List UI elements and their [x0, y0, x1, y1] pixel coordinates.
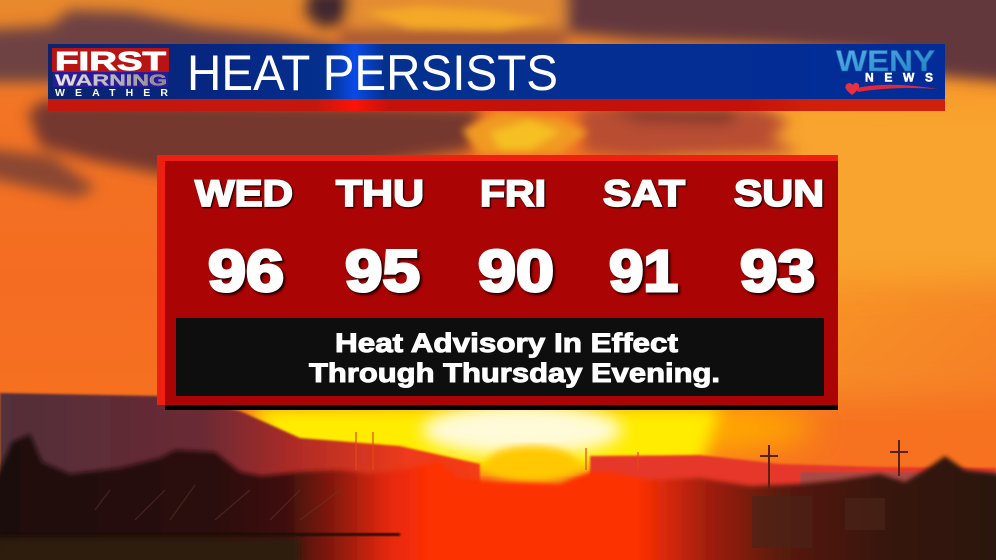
ground and tree line: [0, 432, 996, 560]
logo: First Warning Weather: WEATHER: [55, 87, 168, 99]
temperatures: [208, 239, 815, 304]
forecast panel: [157, 155, 838, 410]
advisory box: [176, 318, 824, 396]
sun glow: [235, 392, 815, 482]
clouds: [0, 0, 996, 198]
distant hills: [0, 393, 996, 510]
day labels: THU: [336, 173, 424, 214]
day labels: [195, 173, 824, 214]
logo: WENY News: [836, 45, 938, 95]
logo: First Warning Weather: [52, 46, 169, 99]
temperatures: 91: [609, 239, 678, 304]
advisory box: Through Thursday Evening.: [309, 358, 720, 388]
temperatures: 96: [208, 239, 284, 304]
logo: WENY News: NEWS: [865, 70, 933, 84]
day labels: FRI: [480, 173, 546, 214]
advisory box: Heat Advisory In Effect: [335, 328, 678, 358]
title: HEAT PERSISTS: [187, 45, 558, 101]
day labels: WED: [195, 173, 293, 214]
temperatures: 95: [345, 239, 420, 304]
day labels: SUN: [734, 173, 824, 214]
day labels: SAT: [603, 173, 685, 214]
logo: First Warning Weather: FIRST: [55, 46, 166, 76]
logo: WENY News: WENY: [836, 45, 935, 78]
header bar: [48, 44, 945, 111]
temperatures: 90: [478, 239, 554, 304]
logo: First Warning Weather: WARNING: [55, 72, 167, 90]
temperatures: 93: [740, 239, 815, 304]
